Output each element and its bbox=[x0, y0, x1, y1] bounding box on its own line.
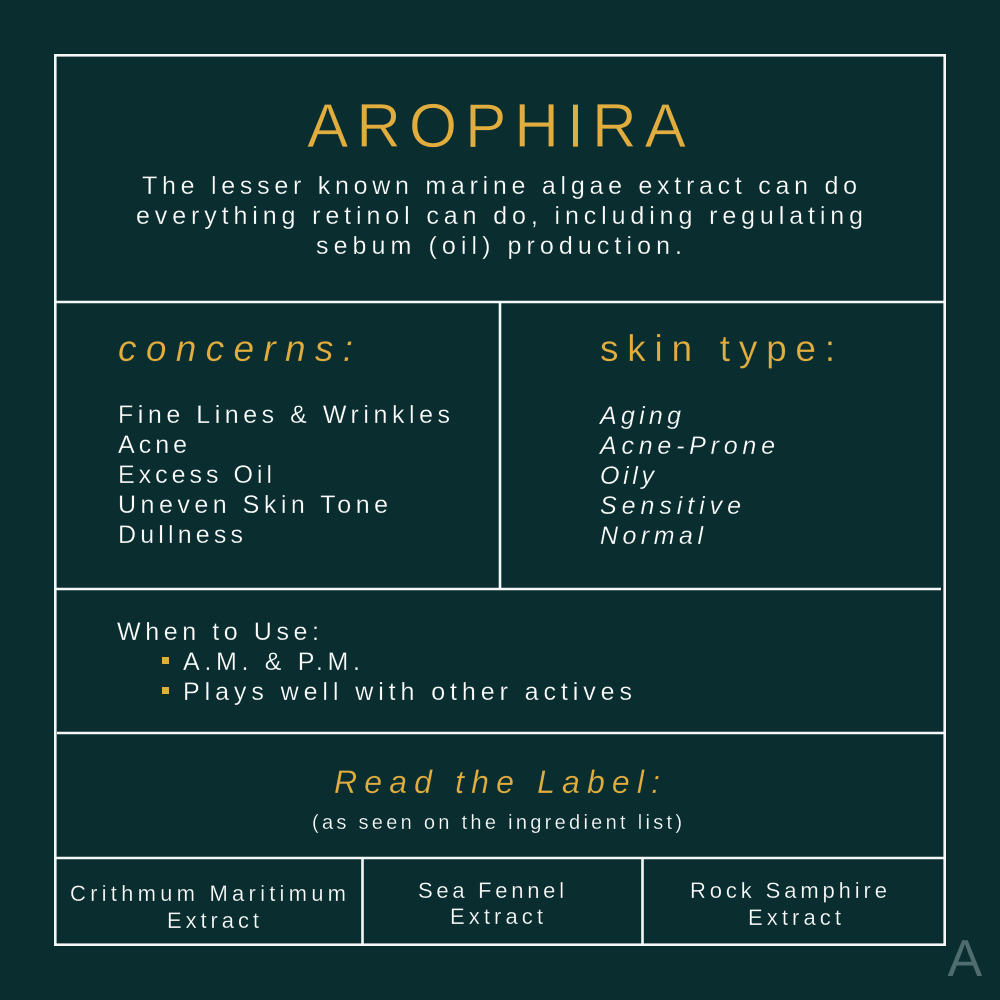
concerns list: Fine Lines & Wrinkles bbox=[118, 401, 450, 429]
when to use heading: When to Use: bbox=[117, 618, 319, 646]
concerns list: Uneven Skin Tone bbox=[118, 491, 388, 519]
concerns list: Dullness bbox=[118, 521, 243, 549]
watermark logo: A bbox=[948, 930, 982, 988]
cell: sea fennel extract: Sea Fennel bbox=[418, 878, 564, 903]
panel: when to use bbox=[117, 618, 632, 706]
cell: rock samphire extract: Rock Samphire bbox=[690, 878, 887, 903]
cell: rock samphire extract: Extract bbox=[748, 905, 841, 930]
skin type list: Normal bbox=[600, 522, 704, 550]
panel: skin type bbox=[598, 328, 835, 550]
description: sebum (oil) production. bbox=[316, 232, 682, 260]
skin type list bbox=[598, 402, 775, 550]
skin type list: Oily bbox=[600, 462, 656, 490]
skin type list: Acne-Prone bbox=[598, 432, 775, 460]
cell: crithmum maritimum extract bbox=[70, 881, 346, 933]
bullet: morning and evening: A.M. & P.M. bbox=[183, 648, 360, 676]
cell: rock samphire extract bbox=[690, 878, 887, 930]
concerns list bbox=[118, 401, 450, 549]
cell: crithmum maritimum extract: Extract bbox=[167, 908, 259, 933]
read the label heading: Read the Label: bbox=[334, 764, 660, 800]
concerns heading: concerns: bbox=[118, 328, 353, 369]
panel: concerns bbox=[118, 328, 450, 549]
cell: crithmum maritimum extract: Crithmum Maritimum bbox=[70, 881, 346, 906]
skin type heading: skin type: bbox=[600, 328, 835, 369]
read the label note: (as seen on the ingredient list) bbox=[312, 812, 682, 834]
description: The lesser known marine algae extract can do bbox=[142, 172, 857, 200]
skin type list: Sensitive bbox=[600, 492, 741, 520]
panel: read the label bbox=[312, 764, 682, 834]
cell: sea fennel extract bbox=[418, 878, 564, 929]
table frame and dividers bbox=[55, 55, 945, 945]
description: everything retinol can do, including regulating bbox=[136, 202, 863, 230]
title: AROPHIRA bbox=[307, 92, 687, 161]
skin type list: Aging bbox=[598, 402, 681, 430]
description bbox=[136, 172, 863, 260]
concerns list: Acne bbox=[118, 431, 187, 459]
bullet: actives: Plays well with other actives bbox=[183, 678, 632, 706]
concerns list: Excess Oil bbox=[118, 461, 272, 489]
panel: header bbox=[136, 92, 863, 260]
cell: sea fennel extract: Extract bbox=[450, 904, 543, 929]
